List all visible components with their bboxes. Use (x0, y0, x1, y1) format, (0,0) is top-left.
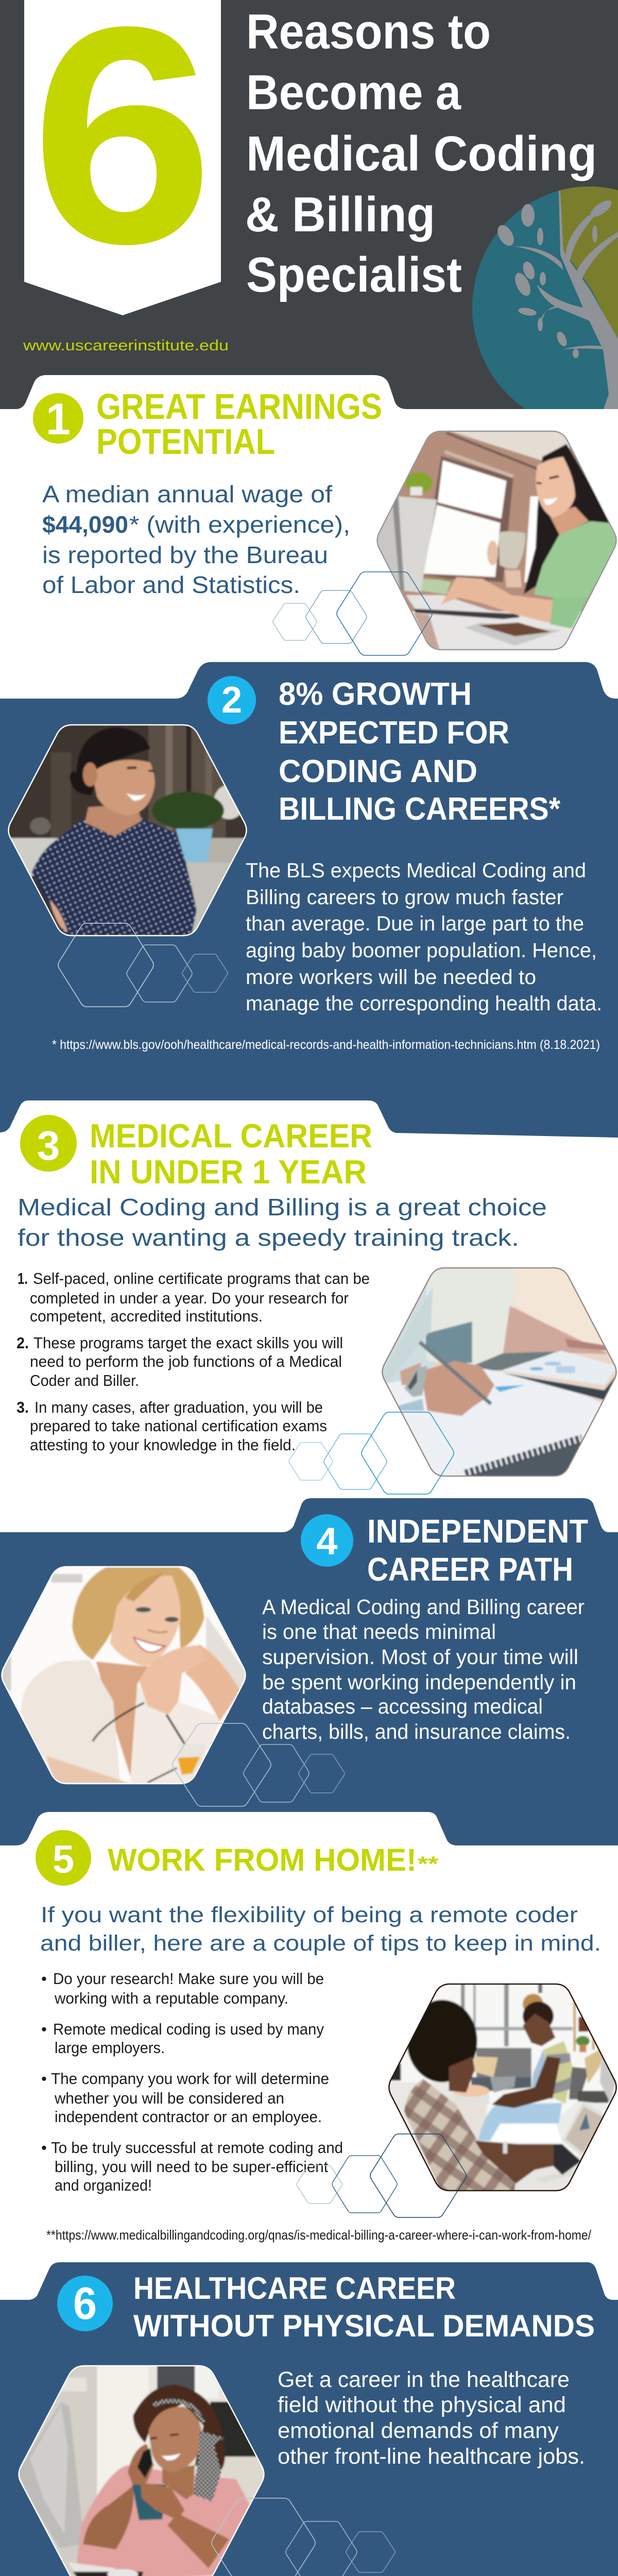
section 3: medical career (16, 1115, 618, 1494)
numbered list: Coder and Biller. (30, 1371, 139, 1389)
numbered list (16, 1269, 370, 1454)
badge 1 (33, 393, 83, 444)
section 6: healthcare panel (0, 2262, 618, 2576)
heading 2: 8% GROWTH (279, 676, 472, 712)
heading 2: BILLING CAREERS* (279, 791, 561, 827)
numbered list: In many cases, after graduation, you will be (35, 1398, 323, 1416)
photo: woman at laptop with mug (371, 428, 618, 654)
badge 1: 1 (46, 395, 71, 444)
bullet list: To be truly successful at remote coding and (51, 2139, 343, 2157)
main title (245, 4, 597, 302)
body text 2 (246, 859, 602, 1015)
hexagon outlines 4 (173, 1723, 345, 1806)
intro text 5 (40, 1903, 601, 1956)
body text 2: manage the corresponding health data. (246, 992, 602, 1015)
bullet list: Remote medical coding is used by many (53, 2020, 324, 2038)
bullet list: working with a reputable company. (54, 1989, 288, 2007)
numbered list: Self-paced, online certificate programs that can be (33, 1269, 370, 1287)
numbered list: competent, accredited institutions. (30, 1307, 263, 1325)
bullet list: billing, you will need to be super-efficient (55, 2158, 328, 2176)
body text 4: charts, bills, and insurance claims. (262, 1720, 571, 1743)
heading 4: INDEPENDENT (367, 1513, 588, 1550)
badge 2: 2 (221, 680, 242, 721)
heading 6: WITHOUT PHYSICAL DEMANDS (133, 2309, 595, 2343)
bullet list: independent contractor or an employee. (55, 2108, 322, 2126)
heading 2 (279, 676, 561, 827)
bullet list: The company you work for will determine (51, 2070, 329, 2088)
body text 4: A Medical Coding and Billing career (262, 1595, 585, 1619)
bullet list: • (41, 2070, 47, 2088)
intro text 3 (18, 1194, 547, 1251)
intro text 5: and biller, here are a couple of tips to keep in mind. (40, 1931, 601, 1956)
body text 4: supervision. Most of your time will (262, 1645, 578, 1669)
bullet list: large employers. (55, 2039, 165, 2057)
body text 6: emotional demands of many (278, 2418, 559, 2443)
bullet list: • (41, 2020, 47, 2038)
numbered list: These programs target the exact skills you will (33, 1334, 343, 1352)
body text 6 (278, 2367, 585, 2469)
photo: woman on phone with mug (13, 2362, 269, 2576)
heading 6: HEALTHCARE CAREER (133, 2271, 456, 2306)
bullet list: • (41, 1970, 47, 1988)
numbered list: prepared to take national certification exams (30, 1417, 327, 1435)
heading 1 (96, 386, 382, 462)
bullet list: Do your research! Make sure you will be (53, 1970, 324, 1988)
badge 6: 6 (73, 2278, 97, 2329)
numbered list: 1. (18, 1269, 28, 1287)
photo: smiling woman in dotted shirt (3, 721, 255, 939)
body text 2: than average. Due in large part to the (246, 912, 584, 935)
photo: curly haired woman with glasses (0, 1564, 252, 1787)
hexagon outlines 5 (297, 2134, 466, 2217)
photo: hand writing on calendar (376, 1265, 618, 1481)
badge 3 (20, 1115, 77, 1172)
heading 3: MEDICAL CAREER (90, 1117, 372, 1155)
main title: & Billing (245, 187, 435, 242)
badge 6 (57, 2276, 113, 2331)
badge 5: 5 (53, 1838, 74, 1882)
badge 4: 4 (316, 1520, 338, 1563)
main title: Specialist (246, 247, 462, 302)
heading 4 (367, 1513, 588, 1588)
body text 1: A median annual wage of (42, 481, 332, 507)
badge 2 (208, 676, 256, 724)
body text 6: other front-line healthcare jobs. (278, 2444, 585, 2469)
hexagon outlines 6 (212, 2498, 395, 2576)
badge 3: 3 (37, 1123, 60, 1168)
heading 2: CODING AND (279, 754, 477, 789)
main title: Reasons to (246, 4, 491, 59)
body text 1: of Labor and Statistics. (42, 571, 300, 598)
body text 1: is reported by the Bureau (42, 541, 328, 568)
numbered list: completed in under a year. Do your research for (30, 1289, 349, 1307)
body text 4: be spent working independently in (262, 1670, 576, 1694)
hexagon outlines 3 (289, 1412, 454, 1494)
body text 1: * (with experience), (129, 511, 350, 538)
main title: Become a (246, 65, 461, 120)
body text 6: Get a career in the healthcare (278, 2367, 570, 2392)
body text 2: aging baby boomer population. Hence, (246, 939, 597, 962)
body text 2: Billing careers to grow much faster (246, 886, 563, 909)
header panel (0, 0, 618, 429)
badge 4 (301, 1514, 353, 1567)
heading 2: EXPECTED FOR (279, 715, 509, 751)
bullet list (41, 1970, 343, 2194)
section 2: growth panel (0, 662, 618, 1138)
heading 1: GREAT EARNINGS (96, 386, 382, 427)
intro text 3: Medical Coding and Billing is a great choice (18, 1194, 547, 1221)
body text 4: databases – accessing medical (262, 1694, 543, 1718)
bullet list: • (41, 2139, 47, 2157)
body text 4: is one that needs minimal (262, 1620, 496, 1643)
header tree emblem (472, 187, 618, 429)
heading 3: IN UNDER 1 YEAR (90, 1153, 367, 1191)
main title: Medical Coding (246, 126, 597, 181)
heading 5: ** (418, 1853, 439, 1875)
numbered list: need to perform the job functions of a Medical (30, 1352, 342, 1370)
heading 6 (133, 2271, 595, 2343)
heading 5: WORK FROM HOME! (108, 1842, 417, 1877)
body text 4 (262, 1595, 585, 1743)
intro text 5: If you want the flexibility of being a remote coder (41, 1903, 578, 1927)
hexagon outlines 2 (58, 923, 228, 1007)
numbered list: 3. (16, 1398, 29, 1416)
hexagon outlines 1 (273, 572, 432, 655)
bullet list: whether you will be considered an (54, 2089, 284, 2107)
heading 1: POTENTIAL (96, 421, 275, 462)
bullet list: and organized! (55, 2176, 152, 2194)
section 1 tab (0, 375, 618, 412)
section 4: independent career panel (0, 1498, 618, 1845)
section 1: earnings (33, 386, 618, 655)
section 5: work from home (36, 1830, 618, 2243)
intro text 3: for those wanting a speedy training track. (18, 1224, 519, 1251)
photo: mother on laptop and daughter (384, 1981, 618, 2195)
body text 2: more workers will be needed to (246, 966, 536, 989)
badge 5 (36, 1830, 91, 1886)
body text 6: field without the physical and (278, 2393, 566, 2417)
numbered list: 2. (16, 1334, 29, 1352)
heading 4: CAREER PATH (367, 1551, 573, 1588)
body text 1: $44,090 (42, 511, 128, 538)
heading 3 (90, 1117, 372, 1191)
body text 1 (42, 481, 350, 598)
ribbon banner (24, 0, 221, 315)
website url: www.uscareerinstitute.edu (23, 337, 229, 354)
numbered list: attesting to your knowledge in the field. (30, 1436, 296, 1454)
body text 2: The BLS expects Medical Coding and (246, 859, 586, 882)
